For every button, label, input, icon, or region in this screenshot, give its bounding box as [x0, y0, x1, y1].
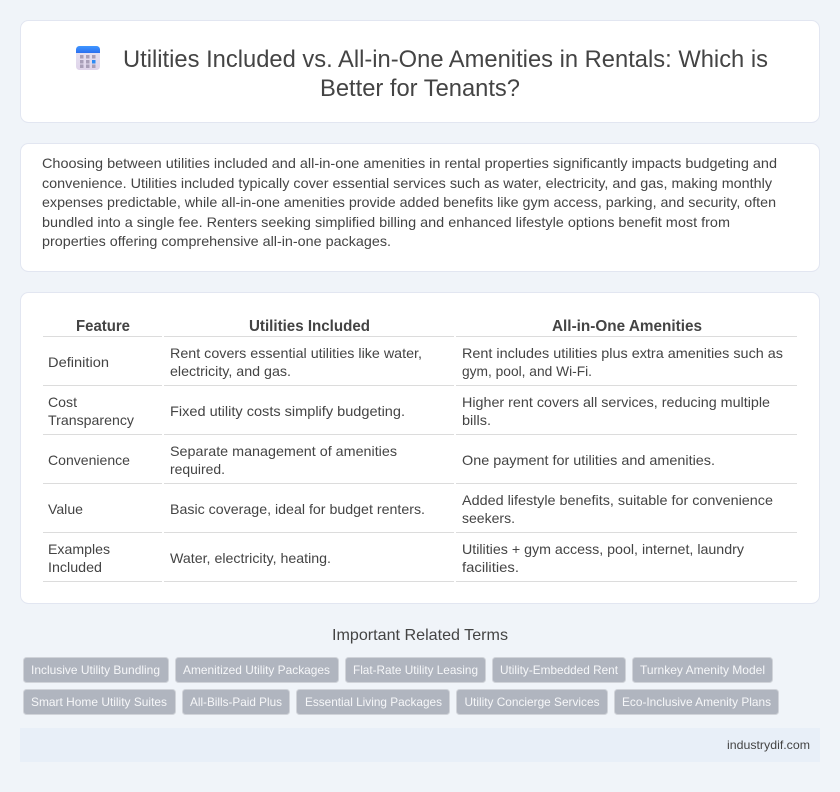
table header row: Feature [76, 318, 130, 335]
tag: essential living packages: Essential Living Packages [305, 695, 442, 709]
tag: all-bills-paid plus: All-Bills-Paid Plus [190, 695, 282, 709]
heading: important related terms: Important Related Terms [332, 627, 508, 644]
table header row: Utilities Included [249, 318, 370, 335]
tag: utility concierge services [456, 690, 608, 714]
panel: comparison table [20, 292, 820, 604]
panel: introduction [20, 144, 820, 272]
tag: inclusive utility bundling: Inclusive Utility Bundling [31, 663, 160, 677]
table row: convenience [43, 443, 797, 484]
tag: turnkey amenity model: Turnkey Amenity Model [640, 663, 765, 677]
text block: introduction paragraph: properties offering comprehensive all-in-one packages. [42, 233, 391, 249]
tag: utility-embedded rent [492, 658, 626, 682]
table row: cost transparency: Fixed utility costs simplify budgeting. [170, 403, 405, 419]
table row: cost transparency: bills. [462, 412, 491, 428]
tag: flat-rate utility leasing [346, 658, 486, 682]
table row: definition [43, 345, 797, 386]
table row: value: Added lifestyle benefits, suitable for convenience [462, 492, 773, 508]
footer [20, 728, 820, 762]
table row: definition: gym, pool, and Wi-Fi. [462, 363, 592, 379]
panel: header [20, 20, 820, 122]
footer: industrydif.com [727, 738, 810, 752]
table row: definition: electricity, and gas. [170, 363, 291, 379]
tag: eco-inclusive amenity plans: Eco-Inclusive Amenity Plans [622, 695, 771, 709]
table row: cost transparency: Transparency [48, 412, 134, 428]
text block: introduction paragraph: expenses predictable, while all-in-one amenities provide added benefits like gym access, parking, and security, often [42, 194, 776, 210]
table row: convenience: One payment for utilities and amenities. [462, 452, 715, 468]
text block: introduction paragraph: convenience. Utilities included typically cover essential services such as water, electricity, and gas, making monthly [42, 175, 772, 191]
tag: amenitized utility packages [176, 658, 338, 682]
icon: calendar [76, 46, 100, 70]
table row: definition: Rent covers essential utilities like water, [170, 345, 422, 361]
table row: cost transparency: Higher rent covers all services, reducing multiple [462, 394, 770, 410]
table row: examples included [43, 541, 797, 582]
tag: turnkey amenity model [632, 658, 772, 682]
tag: inclusive utility bundling [24, 658, 168, 682]
table row: convenience: Separate management of amenities [170, 443, 397, 459]
table row: definition: Rent includes utilities plus extra amenities such as [462, 345, 783, 361]
table header row [43, 318, 797, 337]
related term tags [24, 658, 778, 714]
table row: value: seekers. [462, 510, 515, 526]
tag: utility-embedded rent: Utility-Embedded Rent [500, 663, 619, 677]
table row: value: Value [48, 501, 83, 517]
tag: utility concierge services: Utility Concierge Services [464, 695, 600, 709]
title: Utilities Included vs. All-in-One Amenities in Rentals: Which is [123, 46, 768, 73]
tag: smart home utility suites: Smart Home Utility Suites [31, 695, 167, 709]
tag: amenitized utility packages: Amenitized Utility Packages [183, 663, 330, 677]
tag: all-bills-paid plus [182, 690, 290, 714]
text block: introduction paragraph: bundled into a single fee. Renters seeking simplified billing and enhanced lifestyle options benefit most from [42, 214, 730, 230]
table row: value [43, 492, 797, 533]
tag: smart home utility suites [24, 690, 176, 714]
table row: examples included: Included [48, 559, 102, 575]
table row: cost transparency [43, 394, 797, 435]
title: Better for Tenants? [320, 75, 520, 102]
table row: convenience: required. [170, 461, 225, 477]
table row: examples included: Utilities + gym access, pool, internet, laundry [462, 541, 744, 557]
tag: flat-rate utility leasing: Flat-Rate Utility Leasing [353, 663, 478, 677]
title [123, 46, 768, 102]
table row: definition: Definition [48, 354, 109, 370]
text block: introduction paragraph: Choosing between utilities included and all-in-one amenities in rental properties significantly impacts budgeting and [42, 155, 777, 171]
table row: examples included: Examples [48, 541, 110, 557]
table row: convenience: Convenience [48, 452, 130, 468]
tag: essential living packages [296, 690, 450, 714]
table header row: All-in-One Amenities [552, 318, 702, 335]
tag: eco-inclusive amenity plans [614, 690, 778, 714]
table row: cost transparency: Cost [48, 394, 77, 410]
table row: examples included: facilities. [462, 559, 519, 575]
table row: value: Basic coverage, ideal for budget renters. [170, 501, 425, 517]
table row: examples included: Water, electricity, heating. [170, 550, 331, 566]
text block: introduction paragraph [42, 155, 777, 249]
